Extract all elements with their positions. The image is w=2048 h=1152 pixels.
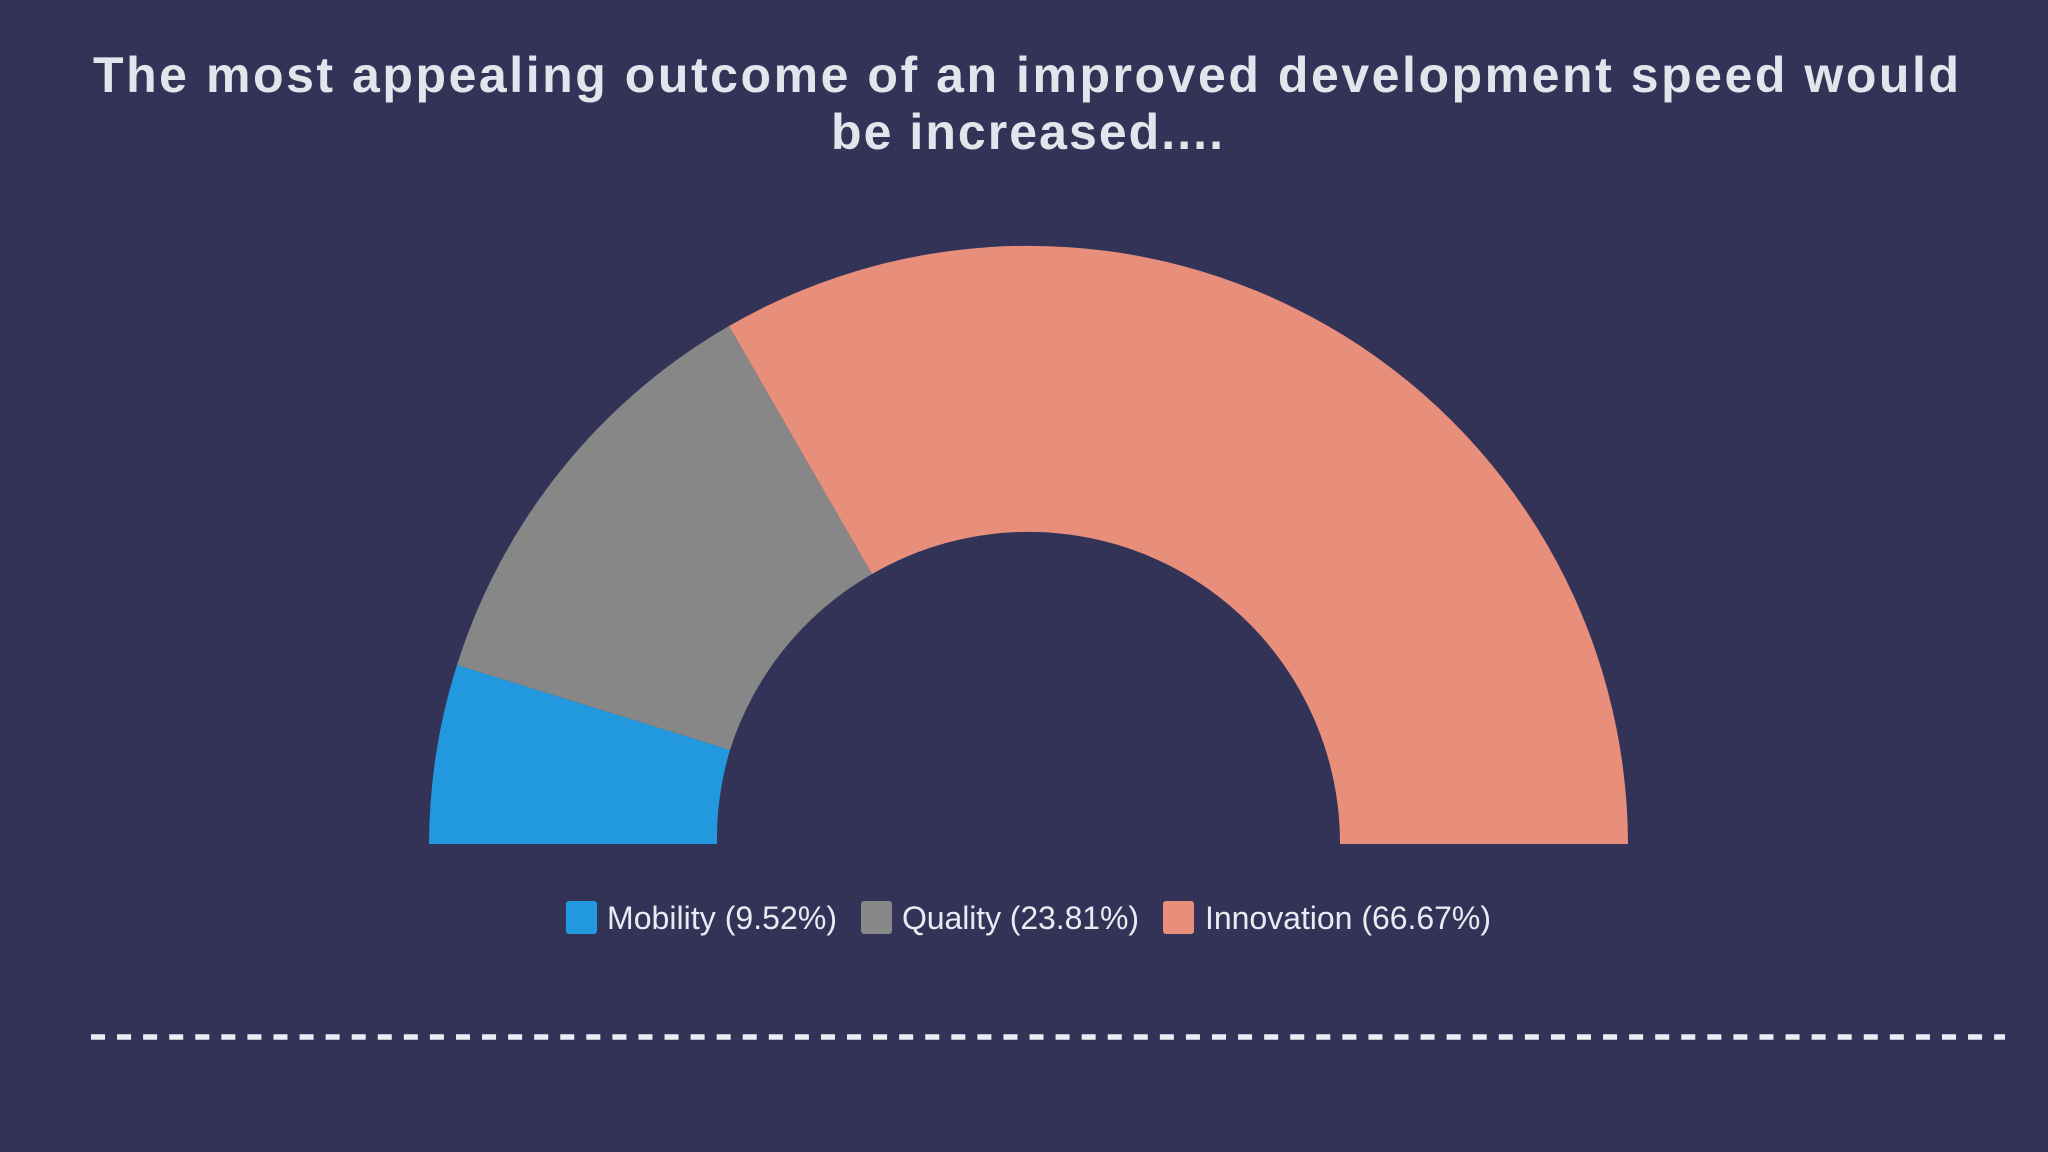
segment: Mobility 9.52%	[429, 665, 730, 844]
title: be increased....	[831, 104, 1223, 160]
legend	[566, 900, 1491, 936]
segment: Quality 23.81%	[457, 326, 872, 750]
legend item: Innovation: Innovation (66.67%)	[1205, 900, 1491, 936]
segment: Innovation 66.67%	[729, 246, 1628, 844]
title: The most appealing outcome of an improved development speed would	[93, 47, 1959, 103]
title	[93, 47, 1959, 160]
legend item: Quality: Quality (23.81%)	[902, 900, 1139, 936]
half-doughnut chart	[429, 246, 1628, 844]
legend item: Mobility: Mobility (9.52%)	[607, 900, 837, 936]
